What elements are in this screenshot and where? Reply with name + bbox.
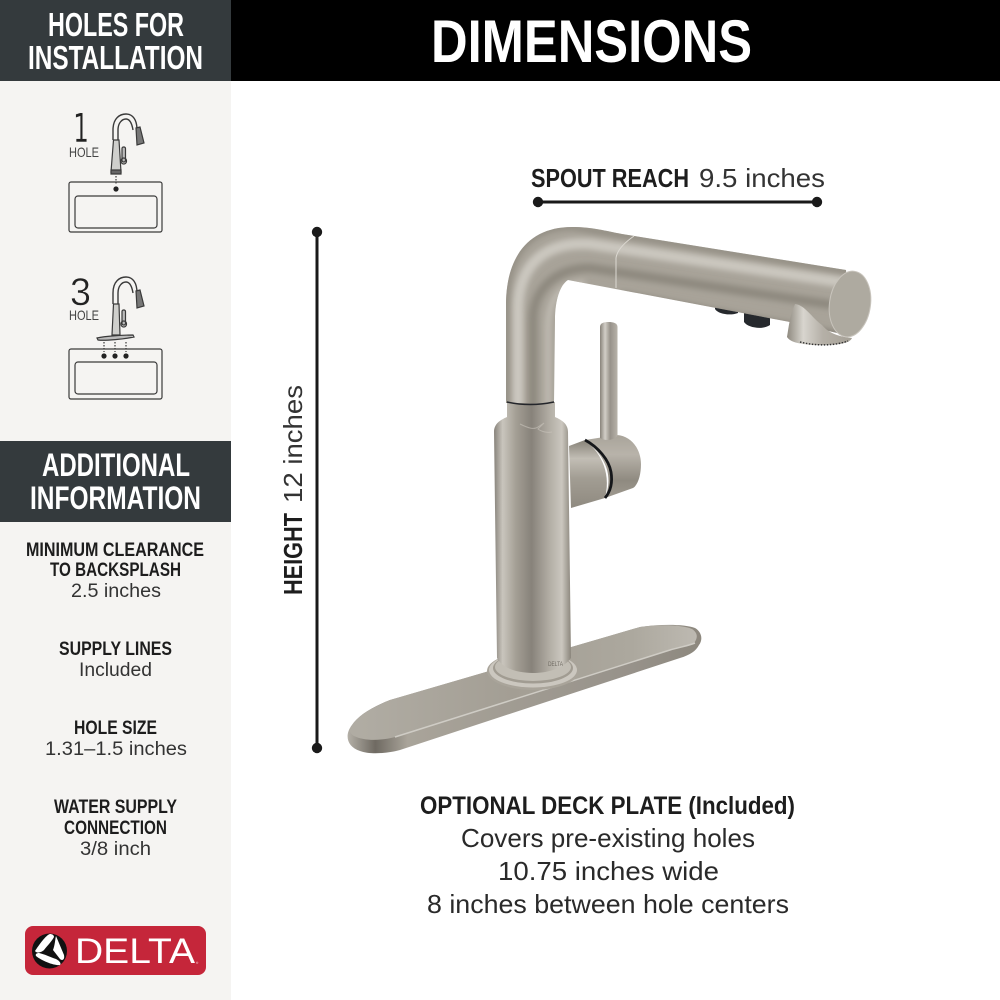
label: spout reach bbox=[531, 163, 825, 193]
text: minimum clearance: TO BACKSPLASH bbox=[50, 560, 181, 581]
faucet body: DELTA bbox=[548, 661, 563, 668]
spout bbox=[506, 227, 846, 406]
product: faucet bbox=[348, 220, 880, 753]
logo: delta: ® bbox=[196, 961, 199, 965]
label: height: HEIGHT bbox=[278, 513, 308, 595]
spout end cap bbox=[825, 268, 875, 340]
logo: delta bbox=[25, 926, 206, 975]
text: minimum clearance: 2.5 inches bbox=[71, 581, 161, 602]
text: optional deck plate: 8 inches between hole centers bbox=[427, 889, 789, 919]
text: hole size bbox=[45, 718, 187, 760]
heading: additional information: INFORMATION bbox=[30, 480, 201, 516]
heading: dimensions bbox=[231, 0, 1000, 81]
label: height bbox=[278, 385, 308, 595]
panel: sidebar bbox=[0, 0, 231, 1000]
deck plate bbox=[348, 625, 701, 753]
spray head bbox=[787, 304, 852, 345]
icon: 1 hole installation: 1 bbox=[73, 106, 89, 152]
arrow: spout reach dimension line bbox=[533, 197, 822, 207]
text: minimum clearance: MINIMUM CLEARANCE bbox=[26, 540, 204, 561]
icon: 3 hole installation: 3 bbox=[70, 271, 91, 314]
heading: dimensions: DIMENSIONS bbox=[431, 8, 752, 75]
heading: holes for installation: INSTALLATION bbox=[28, 39, 203, 76]
handle lever bbox=[600, 322, 618, 440]
heading: additional information: ADDITIONAL bbox=[42, 447, 190, 483]
text: supply lines: Included bbox=[79, 660, 152, 681]
text: optional deck plate: Covers pre-existing holes bbox=[461, 823, 755, 853]
faucet body bbox=[494, 402, 571, 673]
text: optional deck plate: 10.75 inches wide bbox=[498, 856, 719, 886]
text: supply lines bbox=[59, 639, 172, 681]
label: height: 12 inches bbox=[278, 385, 308, 503]
icon: 3 hole installation bbox=[69, 271, 162, 399]
logo: delta: DELTA bbox=[75, 932, 196, 971]
label: spout reach: SPOUT REACH bbox=[531, 163, 689, 193]
text: optional deck plate bbox=[420, 792, 795, 919]
handle hub bbox=[569, 435, 641, 508]
text: water supply connection: 3/8 inch bbox=[80, 839, 151, 860]
icon: 1 hole installation: HOLE bbox=[69, 144, 99, 160]
text: water supply connection bbox=[54, 797, 177, 860]
text: optional deck plate: OPTIONAL DECK PLATE (Included) bbox=[420, 792, 795, 820]
text: hole size: 1.31–1.5 inches bbox=[45, 739, 187, 760]
label: spout reach: 9.5 inches bbox=[699, 163, 825, 193]
text: supply lines: SUPPLY LINES bbox=[59, 639, 172, 660]
heading: holes for installation: HOLES FOR bbox=[48, 6, 184, 43]
sprayer buttons bbox=[715, 304, 770, 328]
text: hole size: HOLE SIZE bbox=[74, 718, 157, 739]
heading: additional information bbox=[0, 441, 231, 522]
icon: 1 hole installation bbox=[69, 106, 162, 232]
arrow: height dimension line bbox=[312, 227, 322, 753]
heading: holes for installation bbox=[0, 0, 231, 81]
text: minimum clearance bbox=[26, 540, 204, 602]
text: water supply connection: CONNECTION bbox=[64, 818, 167, 839]
deck plate ring bbox=[487, 652, 579, 690]
icon: 3 hole installation: HOLE bbox=[69, 307, 99, 323]
text: water supply connection: WATER SUPPLY bbox=[54, 797, 177, 818]
